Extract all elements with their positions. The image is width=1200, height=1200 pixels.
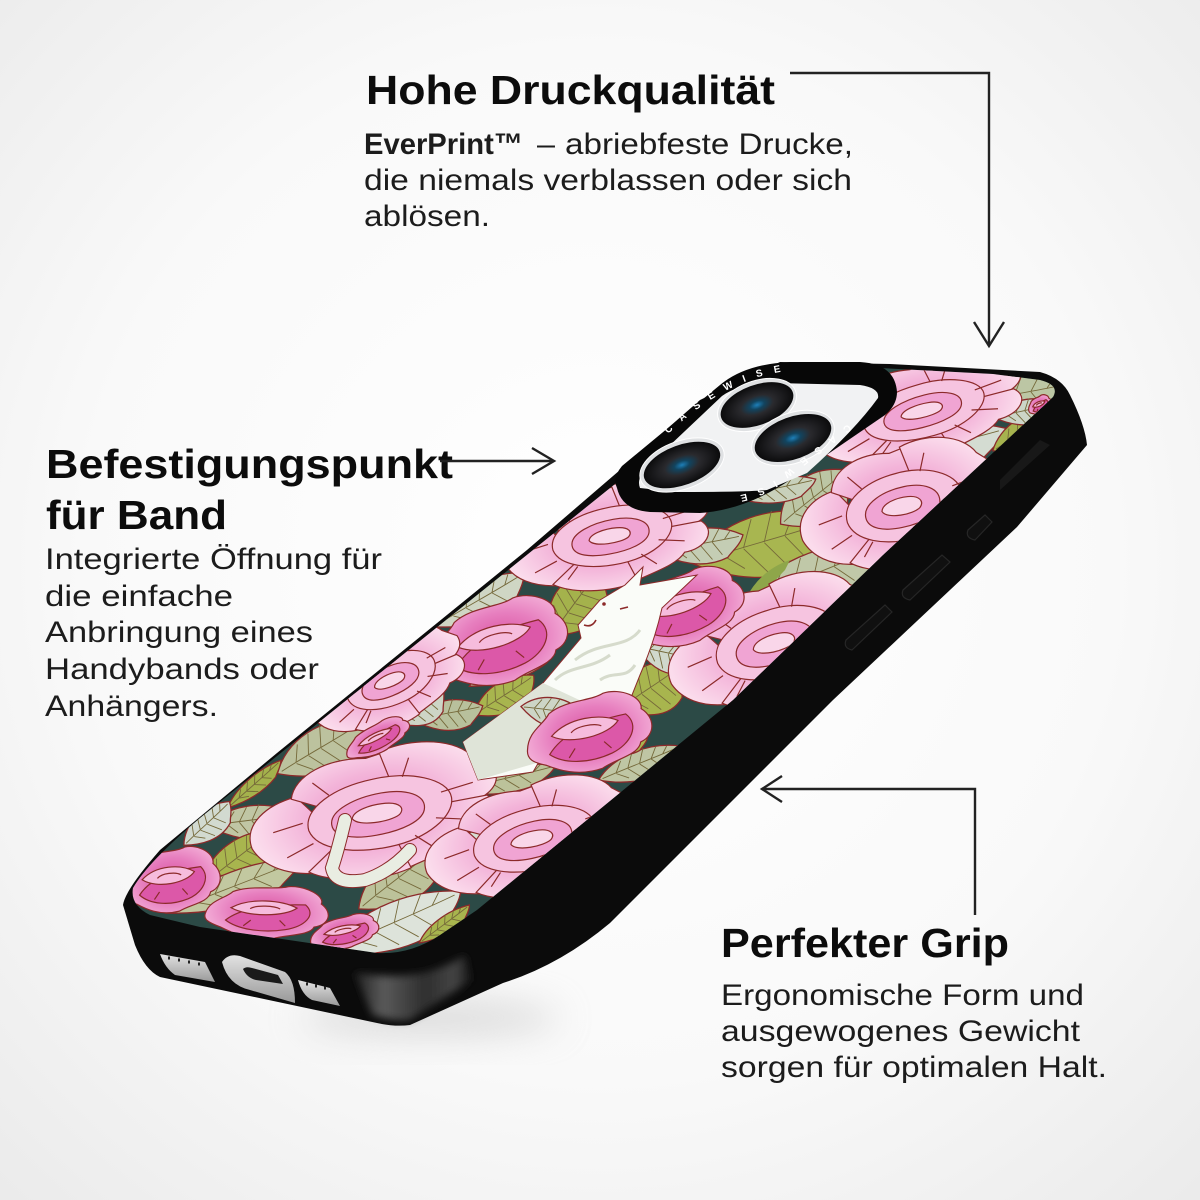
phone case [123, 362, 1087, 1026]
camera window [639, 383, 878, 492]
heading: für Band [46, 492, 227, 538]
body text: ablösen. [364, 200, 490, 233]
camera ring logo: CASEWISE [740, 426, 850, 502]
charging port [222, 955, 295, 1003]
camera lens: right [744, 400, 842, 476]
body text [364, 128, 853, 233]
body text: abriebfeste Drucke, [565, 128, 853, 161]
cat illustration [332, 567, 697, 881]
body text: sorgen für optimalen Halt. [721, 1051, 1107, 1084]
speaker grille right [298, 980, 340, 1006]
case body [123, 362, 1087, 1026]
body text [45, 543, 382, 723]
leaves [160, 366, 1076, 975]
camera island [616, 362, 897, 513]
heading [46, 441, 453, 538]
body text: Handybands oder [45, 653, 319, 686]
camera lens: top [710, 368, 804, 442]
side buttons [845, 440, 1050, 650]
body text: – [537, 128, 555, 161]
arrow: print quality [790, 73, 1004, 346]
body text: die einfache [45, 580, 233, 613]
camera lens: left [632, 427, 732, 503]
heading: Hohe Druckqualität [366, 67, 775, 113]
body text: die niemals verblassen oder sich [364, 164, 852, 197]
speaker grille left [160, 954, 215, 982]
body text: Ergonomische Form und [721, 979, 1084, 1012]
roses [119, 338, 1054, 954]
glossy corner highlight [354, 955, 472, 1020]
arrow: grip [762, 776, 975, 915]
body text: EverPrint™ [364, 128, 523, 161]
heading: Befestigungspunkt [46, 441, 453, 487]
callout: Perfekter Grip [721, 920, 1107, 1084]
arrow: strap attachment [440, 448, 554, 474]
printed back with roses [132, 368, 1055, 954]
body text: Anbringung eines [45, 616, 313, 649]
camera ring logo [665, 365, 850, 502]
body text [721, 979, 1107, 1084]
phone shadow [300, 1000, 560, 1036]
body text: ausgewogenes Gewicht [721, 1015, 1081, 1048]
heading: Perfekter Grip [721, 920, 1009, 966]
body text: Integrierte Öffnung für [45, 543, 382, 576]
cat tail [332, 820, 410, 881]
body text: Anhängers. [45, 690, 218, 723]
camera ring logo: CASEWISE [665, 365, 780, 432]
callout: Hohe Druckqualität [364, 67, 853, 233]
callout: Befestigungspunkt [45, 441, 453, 723]
